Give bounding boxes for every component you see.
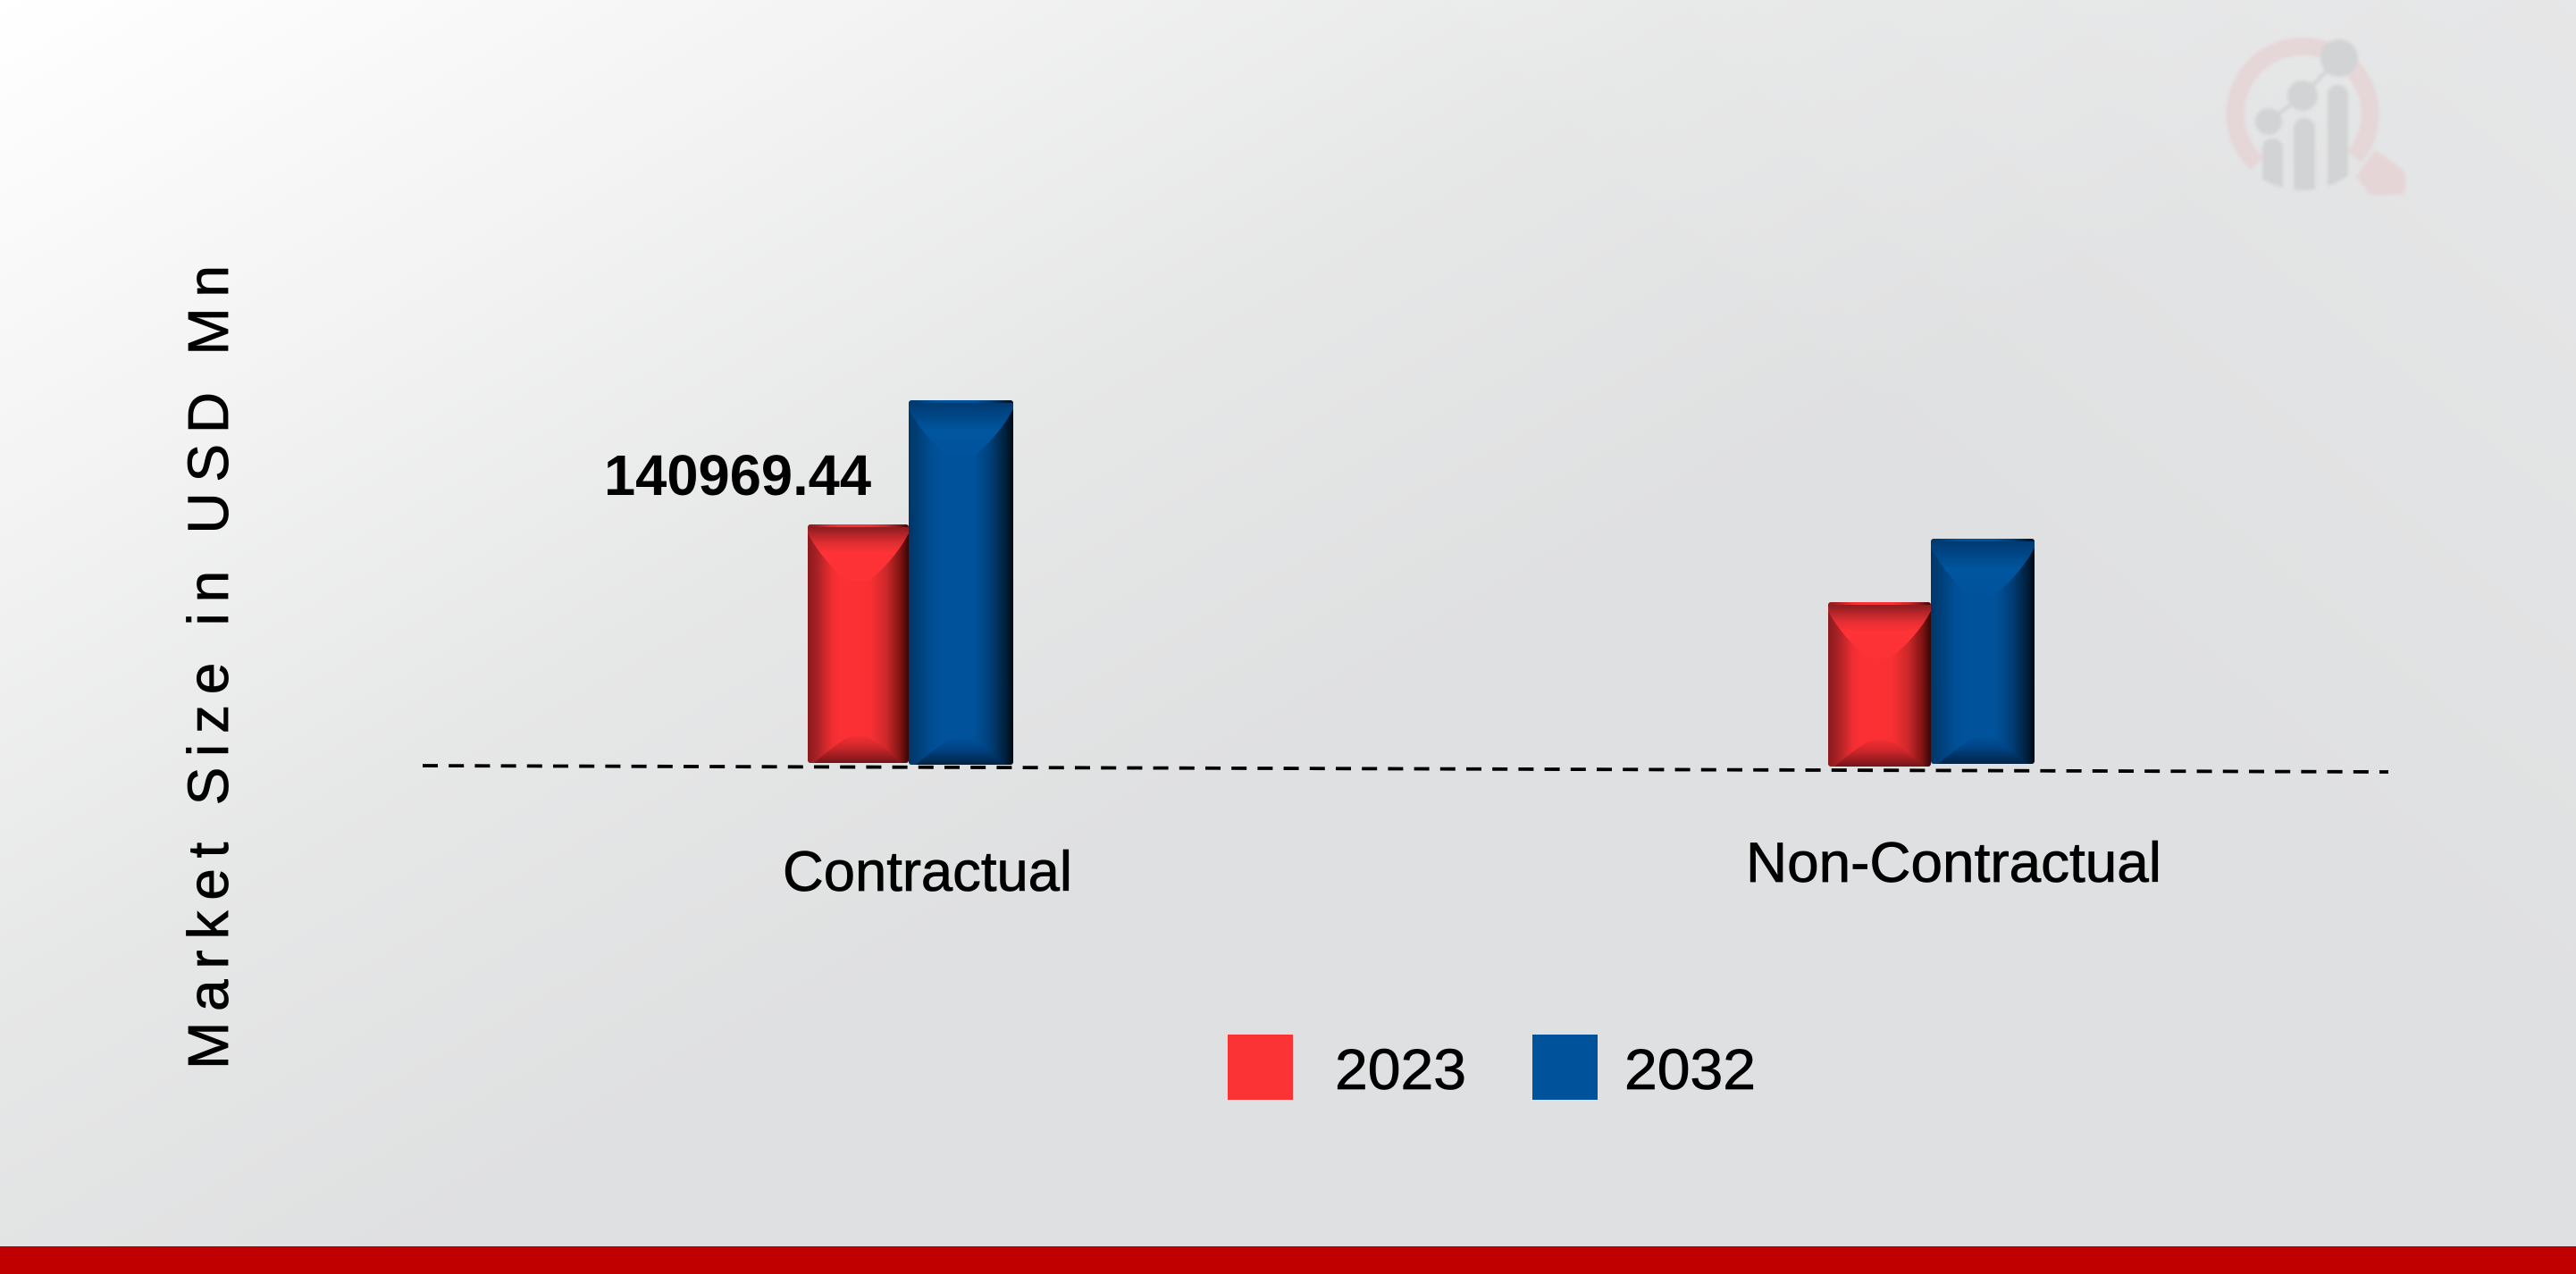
legend <box>1228 1035 1756 1102</box>
bar: Contractual 2023 <box>808 524 909 763</box>
legend swatch: 2023 <box>1228 1035 1293 1100</box>
category label: Non-Contractual: Non-Contractual <box>1746 832 2161 894</box>
baseline: dashed axis <box>423 766 2388 772</box>
y axis title: Market Size in USD Mn <box>176 265 240 1069</box>
icon: watermark logo <box>2236 39 2405 201</box>
legend label: 2032: 2032 <box>1624 1037 1756 1102</box>
data label: Contractual 2023 value: 140969.44 <box>604 443 871 507</box>
footer bar <box>0 1246 2576 1274</box>
category label: Contractual: Contractual <box>783 841 1072 903</box>
bar: Non-Contractual 2032 <box>1931 539 2035 764</box>
legend label: 2023: 2023 <box>1335 1037 1466 1102</box>
bar: Non-Contractual 2023 <box>1828 602 1931 767</box>
bar chart <box>808 400 2035 767</box>
legend swatch: 2032 <box>1532 1035 1598 1100</box>
bar: Contractual 2032 <box>909 400 1013 765</box>
